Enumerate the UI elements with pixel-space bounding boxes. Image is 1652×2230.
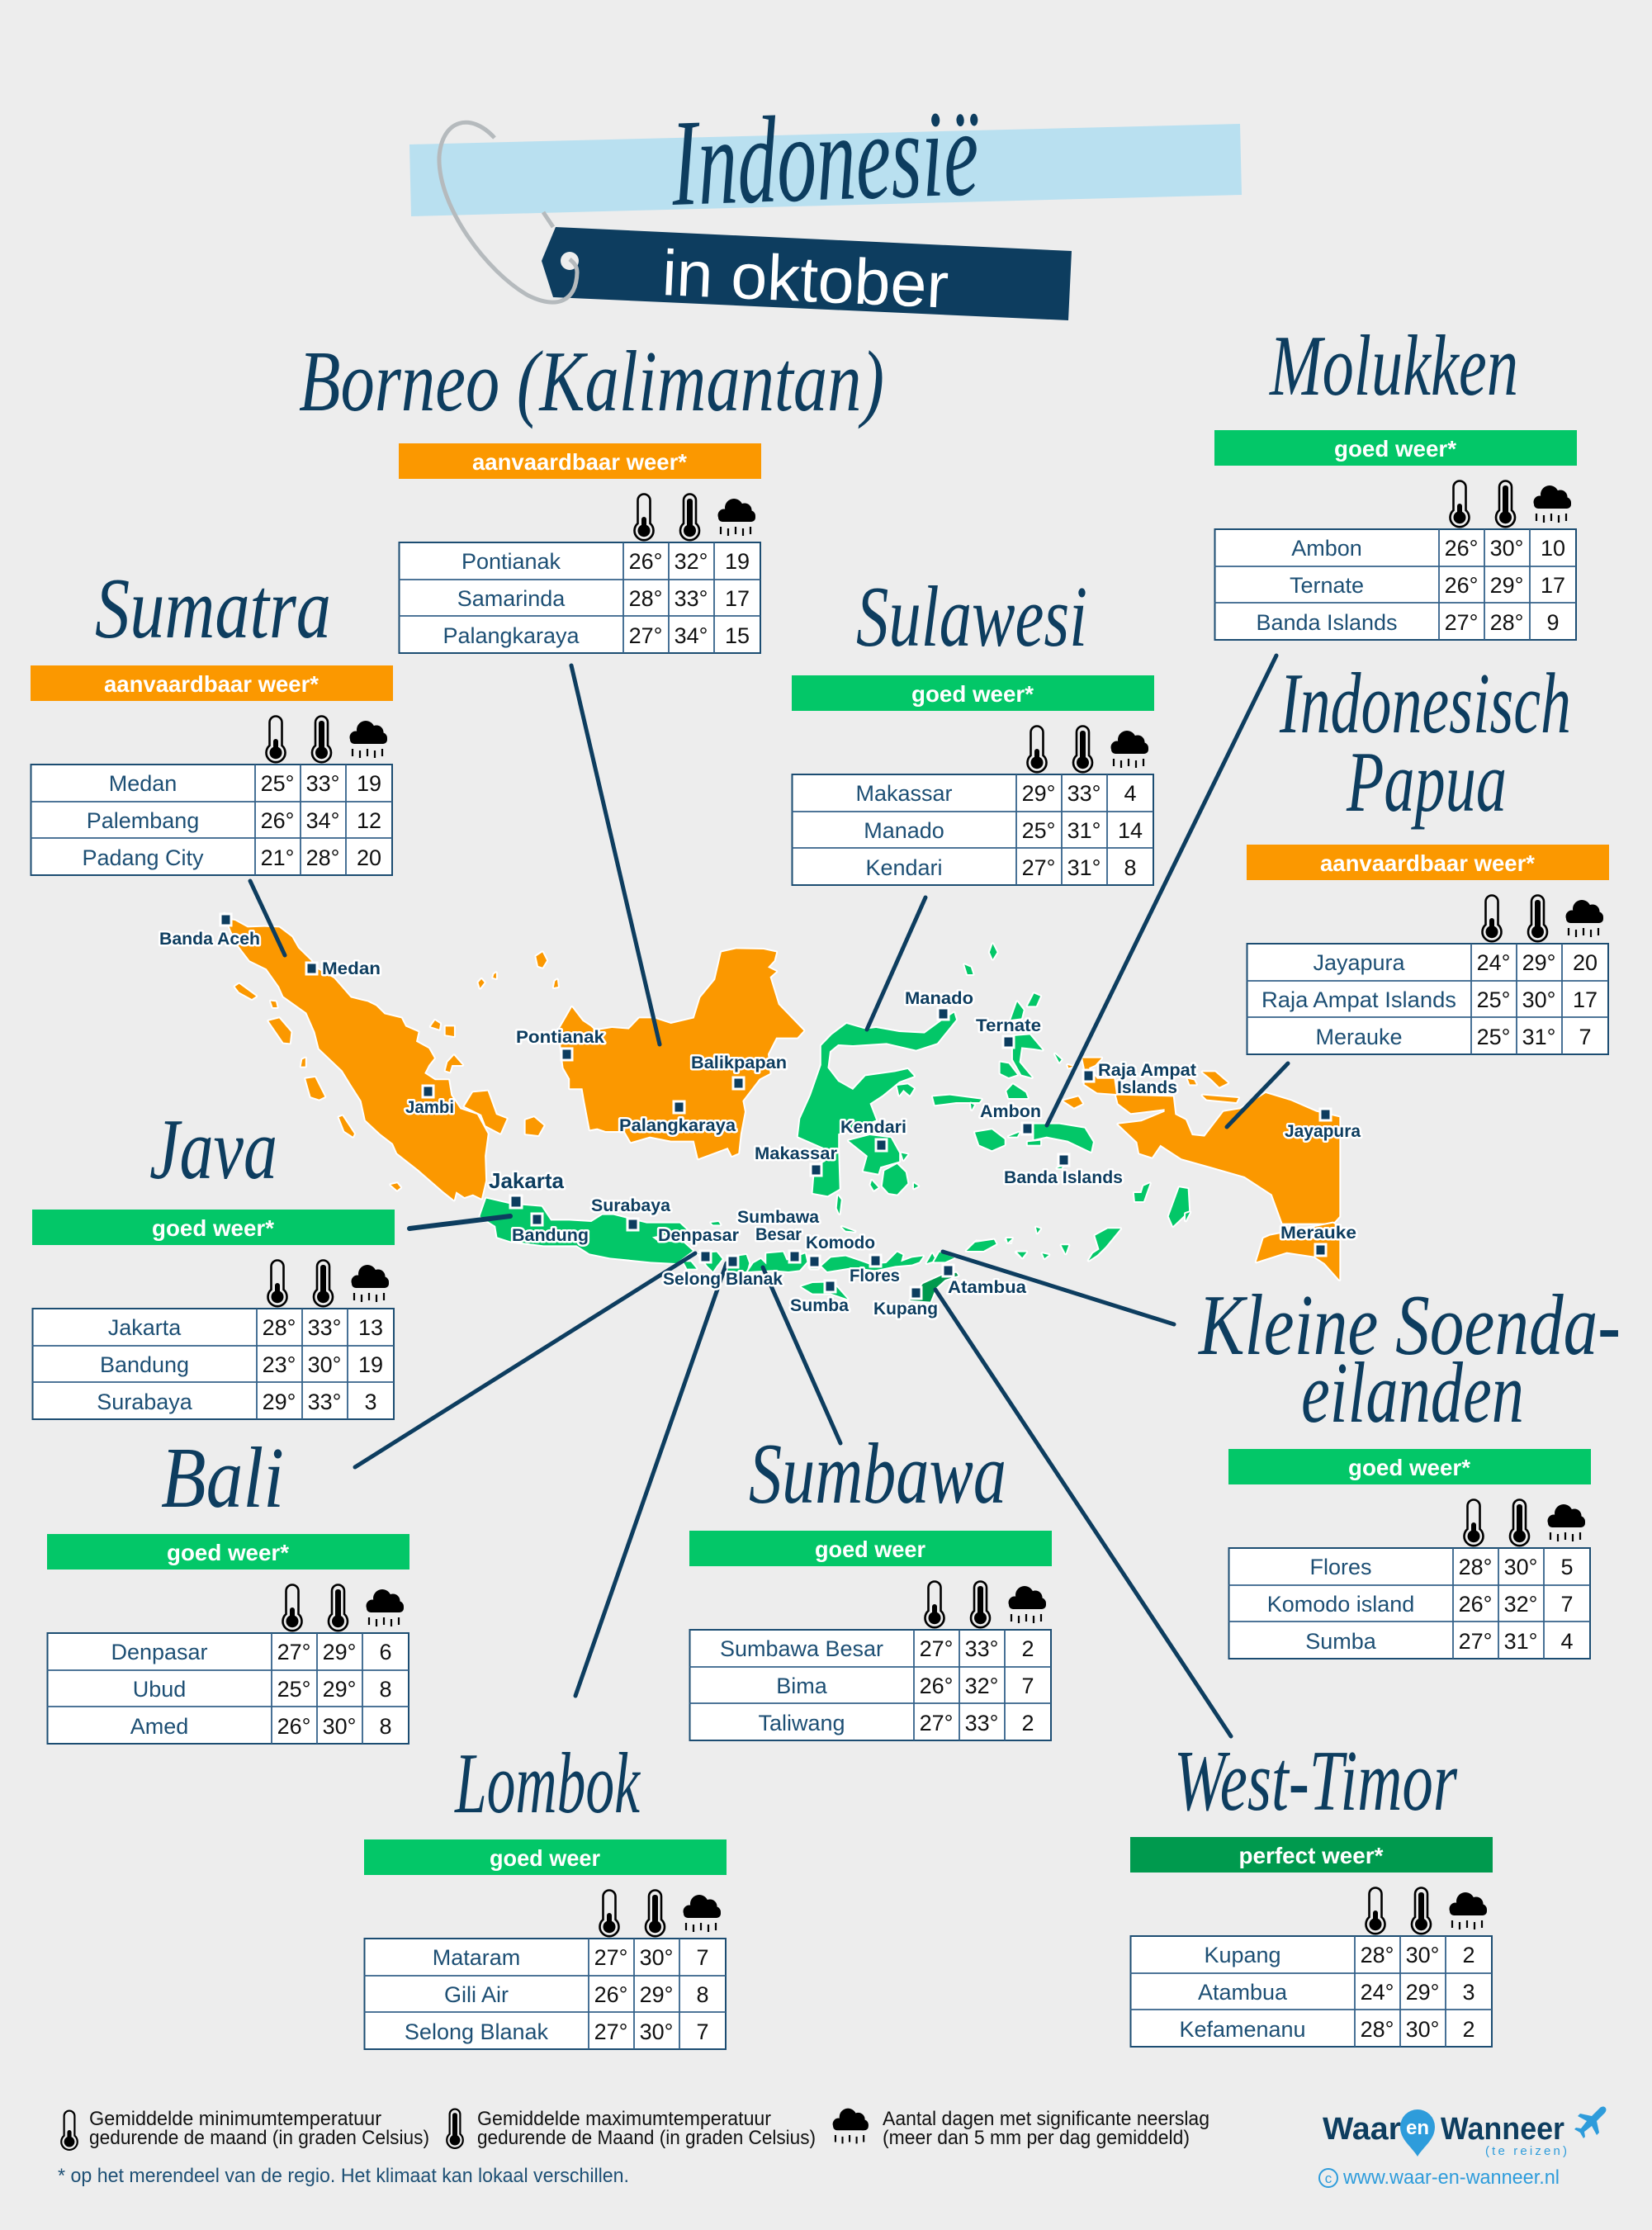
table: 15: [725, 623, 750, 648]
marker: Denpasar: Denpasar: [658, 1226, 739, 1245]
marker: Surabaya: [591, 1196, 670, 1230]
panel: Molukken: [1214, 430, 1577, 640]
marker: Banda Aceh: [159, 914, 260, 949]
table: Medan: [109, 771, 177, 796]
heading: Indonesisch Papua: Papua: [1346, 733, 1507, 830]
table: 24°: [1361, 1980, 1394, 2005]
marker: Palangkaraya: Palangkaraya: [619, 1116, 736, 1135]
table: Komodo island: [1267, 1592, 1414, 1617]
table: 8: [696, 1982, 709, 2007]
rating banner: goed weer*: [167, 1540, 289, 1565]
marker: Kupang: Kupang: [873, 1300, 938, 1319]
icons: [282, 1585, 404, 1631]
table: 29°: [323, 1640, 356, 1664]
table: 17: [1573, 987, 1598, 1012]
legend: minimum temperature: [61, 2108, 429, 2150]
table: 30°: [1504, 1555, 1537, 1579]
marker: Kupang: [873, 1287, 938, 1319]
marker: Flores: [850, 1255, 900, 1285]
legend: maximum temperature: Gemiddelde maximumtemperatuur: [477, 2108, 771, 2130]
table: 33°: [675, 586, 708, 611]
table: 33°: [1067, 781, 1101, 806]
table: 25°: [261, 771, 294, 796]
marker: Selong Blanak: [663, 1256, 783, 1289]
table: Samarinda: [457, 586, 566, 611]
table: 30°: [640, 2019, 673, 2044]
marker: Raja Ampat Islands: Raja Ampat: [1098, 1061, 1196, 1080]
legend: rain days: Aantal dagen met significante neerslag: [883, 2108, 1209, 2130]
table: Surabaya: [97, 1390, 193, 1414]
table: Pontianak: [462, 549, 561, 574]
table: 28°: [1361, 2017, 1394, 2042]
table: Selong Blanak: [405, 2019, 549, 2044]
panel: Borneo: [399, 443, 761, 653]
heading: Kleine Soenda-eilanden: [1197, 1276, 1621, 1441]
rating banner: [1247, 845, 1609, 880]
marker: Merauke: [1280, 1224, 1356, 1256]
icons: [1465, 1499, 1585, 1546]
marker: Ternate: [976, 1016, 1041, 1048]
table: Ubud: [133, 1677, 186, 1702]
marker: Jakarta: Jakarta: [489, 1168, 565, 1193]
marker: Jakarta: [489, 1168, 565, 1208]
marker: Sumbawa Besar: Sumbawa: [737, 1208, 819, 1227]
table: Jayapura: [1313, 950, 1406, 975]
table: 31°: [1067, 818, 1101, 843]
table: 26°: [629, 549, 662, 574]
logo: Waar en Wanneer: Wanneer: [1441, 2112, 1564, 2147]
marker: Bandung: [512, 1214, 589, 1245]
rating banner: [792, 675, 1154, 711]
logo: Waar en Wanneer: [1323, 2107, 1606, 2158]
table: 27°: [1445, 610, 1478, 635]
heading: Sulawesi: Sulawesi: [856, 568, 1087, 665]
title band: [409, 124, 1242, 216]
marker: Jambi: [405, 1086, 454, 1117]
website: www.waar-en-wanneer.nl: [1342, 2166, 1560, 2189]
table: 20: [357, 845, 381, 870]
marker: Raja Ampat Islands: [1083, 1061, 1196, 1097]
table: 8: [379, 1714, 392, 1739]
table: 27°: [629, 623, 662, 648]
title: Indonesië: [669, 84, 982, 232]
rating banner: aanvaardbaar weer*: [104, 671, 319, 697]
table: [31, 765, 392, 875]
table: 31°: [1522, 1025, 1555, 1049]
table: Ternate: [1290, 573, 1364, 598]
table: 7: [696, 2019, 709, 2044]
table: Flores: [1309, 1555, 1372, 1579]
marker: Banda Islands: Banda Islands: [1004, 1168, 1123, 1187]
rating banner: goed weer*: [911, 681, 1034, 707]
panel: West-Timor: [1130, 1837, 1493, 2047]
heading: Sumatra: Sumatra: [95, 560, 331, 656]
legend: minimum temperature: Gemiddelde minimumtemperatuur: [89, 2108, 381, 2130]
table: 29°: [263, 1390, 296, 1414]
table: 5: [1560, 1555, 1574, 1579]
table: [792, 774, 1153, 885]
rating banner: [31, 665, 393, 701]
marker: Sumbawa Besar: Besar: [755, 1225, 802, 1244]
marker: Jambi: Jambi: [405, 1098, 454, 1117]
table: [47, 1633, 409, 1744]
table: 34°: [675, 623, 708, 648]
table: 27°: [277, 1640, 310, 1664]
table: 29°: [323, 1677, 356, 1702]
table: [1130, 1936, 1492, 2047]
table: 33°: [308, 1315, 341, 1340]
logo: Waar en Wanneer: Waar: [1323, 2112, 1401, 2147]
icons: [925, 1582, 1046, 1627]
table: 28°: [263, 1315, 296, 1340]
table: 30°: [323, 1714, 356, 1739]
table: 13: [358, 1315, 383, 1340]
table: 32°: [965, 1674, 998, 1698]
table: [689, 1630, 1051, 1740]
marker: Merauke: Merauke: [1280, 1224, 1356, 1243]
marker: Makassar: Makassar: [755, 1144, 837, 1163]
heading: West-Timor: West-Timor: [1174, 1732, 1458, 1829]
rating banner: [1228, 1449, 1591, 1484]
table: 25°: [1477, 987, 1510, 1012]
table: [1214, 529, 1576, 640]
table: 4: [1124, 781, 1137, 806]
rating banner: aanvaardbaar weer*: [1320, 850, 1535, 876]
footnote: * op het merendeel van de regio. Het klimaat kan lokaal verschillen.: [58, 2165, 629, 2187]
rating banner: [364, 1839, 727, 1875]
rating banner: [1214, 430, 1577, 466]
table: 21°: [261, 845, 294, 870]
marker: Komodo: [806, 1233, 875, 1267]
table: 19: [725, 549, 750, 574]
map: Sulawesi and Maluku: [798, 944, 1190, 1261]
marker: Manado: Manado: [905, 989, 973, 1008]
table: 2: [1462, 1943, 1475, 1967]
heading: Java: Java: [149, 1101, 277, 1197]
heading: Kleine Soenda-eilanden: eilanden: [1301, 1344, 1524, 1441]
table: Kendari: [865, 855, 943, 880]
rating banner: goed weer: [490, 1845, 600, 1871]
table: 27°: [920, 1636, 953, 1661]
table: 2: [1021, 1711, 1034, 1735]
panel: Sumbawa: [689, 1531, 1052, 1740]
legend: minimum temperature: gedurende de maand (in graden Celsius): [89, 2127, 429, 2149]
table: Manado: [864, 818, 944, 843]
table: Raja Ampat Islands: [1261, 987, 1456, 1012]
table: 19: [358, 1352, 383, 1377]
rating banner: [399, 443, 761, 479]
table: Makassar: [855, 781, 953, 806]
icons: [599, 1891, 721, 1936]
rating banner: goed weer: [815, 1536, 925, 1562]
table: Ambon: [1291, 536, 1362, 561]
table: 27°: [1459, 1629, 1492, 1654]
tag: in oktober: in oktober: [660, 236, 950, 322]
panel: Java: [32, 1210, 395, 1419]
marker: Ternate: Ternate: [976, 1016, 1041, 1035]
tag: in oktober: [439, 122, 1072, 322]
table: Denpasar: [111, 1640, 208, 1664]
marker: Raja Ampat Islands: Islands: [1117, 1078, 1177, 1097]
legend: maximum temperature: gedurende de Maand (in graden Celsius): [477, 2127, 816, 2149]
table: Merauke: [1315, 1025, 1403, 1049]
table: 33°: [965, 1711, 998, 1735]
table: 26°: [1445, 536, 1478, 561]
table: 2: [1021, 1636, 1034, 1661]
leader lines: [250, 656, 1288, 1736]
marker: Jayapura: [1285, 1109, 1361, 1141]
table: Mataram: [433, 1945, 520, 1970]
table: 33°: [965, 1636, 998, 1661]
table: 3: [364, 1390, 377, 1414]
panel: Bali: [47, 1534, 409, 1744]
table: 4: [1560, 1629, 1574, 1654]
table: 33°: [306, 771, 339, 796]
legend: [61, 2108, 1209, 2150]
icons: [1450, 481, 1571, 527]
table: 31°: [1504, 1629, 1537, 1654]
table: 25°: [1477, 1025, 1510, 1049]
table: Sumbawa Besar: [720, 1636, 883, 1661]
icons: [1366, 1887, 1487, 1934]
icons: [1483, 895, 1603, 941]
table: 20: [1573, 950, 1598, 975]
table: 27°: [594, 2019, 627, 2044]
table: 30°: [640, 1945, 673, 1970]
marker: Atambua: Atambua: [948, 1278, 1026, 1297]
icons: [266, 717, 387, 762]
rating banner: perfect weer*: [1238, 1843, 1384, 1868]
marker: Flores: Flores: [850, 1267, 900, 1285]
table: [32, 1309, 394, 1419]
panel: Sulawesi: [792, 675, 1154, 885]
table: 7: [1579, 1025, 1592, 1049]
marker: Jayapura: Jayapura: [1285, 1122, 1361, 1141]
table: 3: [1462, 1980, 1475, 2005]
marker: Sumbawa Besar: [737, 1208, 819, 1262]
heading: Bali: Bali: [161, 1429, 284, 1526]
table: Amed: [130, 1714, 188, 1739]
table: 25°: [1022, 818, 1055, 843]
map of Indonesia: [225, 914, 1339, 1302]
map city labels and markers: [159, 914, 1361, 1319]
table: 26°: [261, 808, 294, 833]
heading: Borneo: Borneo (Kalimantan): [299, 333, 884, 429]
table: 27°: [1022, 855, 1055, 880]
table: [1228, 1548, 1590, 1659]
panel: Kleine Soenda-eilanden: [1228, 1449, 1591, 1659]
table: 30°: [1406, 1943, 1439, 1967]
table: 28°: [629, 586, 662, 611]
table: 29°: [1522, 950, 1555, 975]
table: 23°: [263, 1352, 296, 1377]
table: Gili Air: [444, 1982, 509, 2007]
table: 7: [696, 1945, 709, 1970]
icons: [267, 1260, 389, 1306]
table: 27°: [920, 1711, 953, 1735]
legend: maximum temperature: [447, 2108, 816, 2149]
marker: Pontianak: [516, 1028, 604, 1060]
marker: Medan: Medan: [322, 959, 381, 978]
table: 26°: [1459, 1592, 1492, 1617]
table: 32°: [1504, 1592, 1537, 1617]
table: 26°: [1445, 573, 1478, 598]
map: Papua: [1063, 1058, 1339, 1280]
marker: Denpasar: [658, 1226, 739, 1262]
website: c: [1325, 2171, 1332, 2186]
table: Banda Islands: [1256, 610, 1398, 635]
table: 30°: [1522, 987, 1555, 1012]
table: 26°: [920, 1674, 953, 1698]
table: Kefamenanu: [1179, 2017, 1306, 2042]
table: 9: [1546, 610, 1560, 635]
table: 26°: [594, 1982, 627, 2007]
table: 29°: [1406, 1980, 1439, 2005]
marker: Palangkaraya: [619, 1101, 736, 1135]
panel: Sumatra: [31, 665, 393, 875]
icons: [634, 494, 755, 540]
rating banner: goed weer*: [1348, 1455, 1470, 1480]
marker: Balikpapan: Balikpapan: [691, 1053, 787, 1072]
rating banner: [689, 1531, 1052, 1566]
table: Kupang: [1204, 1943, 1281, 1967]
marker: Bandung: Bandung: [512, 1226, 589, 1245]
table: 2: [1462, 2017, 1475, 2042]
heading: Lombok: Lombok: [454, 1735, 641, 1831]
legend: rain days: [833, 2108, 1209, 2149]
table: [1247, 944, 1608, 1054]
rating banner: [1130, 1837, 1493, 1873]
table: Palangkaraya: [443, 623, 580, 648]
table: 7: [1021, 1674, 1034, 1698]
table: 19: [357, 771, 381, 796]
table: 8: [1124, 855, 1137, 880]
table: 10: [1541, 536, 1565, 561]
marker: Manado: [905, 989, 973, 1020]
marker: Banda Aceh: Banda Aceh: [159, 930, 260, 949]
marker: Surabaya: Surabaya: [591, 1196, 670, 1215]
table: 28°: [1361, 1943, 1394, 1967]
table: 31°: [1067, 855, 1101, 880]
rating banner: [32, 1210, 395, 1245]
logo: Waar en Wanneer: en: [1406, 2117, 1429, 2139]
table: 30°: [1406, 2017, 1439, 2042]
marker: Komodo: Komodo: [806, 1233, 875, 1252]
map: Java and Lesser Sunda islands: [480, 1199, 1026, 1302]
table: 27°: [594, 1945, 627, 1970]
legend: rain days: (meer dan 5 mm per dag gemiddeld): [883, 2127, 1190, 2149]
marker: Kendari: Kendari: [840, 1118, 906, 1137]
marker: Sumba: Sumba: [790, 1296, 849, 1315]
table: Palembang: [87, 808, 199, 833]
table: 26°: [277, 1714, 310, 1739]
table: Atambua: [1198, 1980, 1288, 2005]
table: Bandung: [100, 1352, 189, 1377]
marker: Kendari: [840, 1118, 906, 1151]
table: 24°: [1477, 950, 1510, 975]
marker: Banda Islands: [1004, 1154, 1123, 1187]
heading: Sumbawa: Sumbawa: [749, 1425, 1006, 1522]
marker: Pontianak: Pontianak: [516, 1028, 604, 1047]
marker: Ambon: [980, 1102, 1041, 1134]
table: 30°: [308, 1352, 341, 1377]
table: 8: [379, 1677, 392, 1702]
table: Jakarta: [108, 1315, 182, 1340]
table: 32°: [675, 549, 708, 574]
logo: Waar en Wanneer: (te reizen): [1485, 2144, 1567, 2158]
table: 7: [1560, 1592, 1574, 1617]
rating banner: aanvaardbaar weer*: [472, 449, 687, 475]
heading: Indonesisch Papua: [1279, 655, 1571, 830]
marker: Sumba: [790, 1281, 849, 1315]
table: 28°: [1459, 1555, 1492, 1579]
rating banner: [47, 1534, 409, 1570]
rating banner: goed weer*: [152, 1215, 274, 1241]
marker: Ambon: Ambon: [980, 1102, 1041, 1121]
table: 29°: [1022, 781, 1055, 806]
heading: Molukken: Molukken: [1269, 317, 1518, 414]
marker: Selong Blanak: Selong Blanak: [663, 1270, 783, 1289]
table: 14: [1118, 818, 1143, 843]
panel: Indonesisch Papua: [1247, 845, 1609, 1054]
table: 6: [379, 1640, 392, 1664]
table: 33°: [308, 1390, 341, 1414]
table: 25°: [277, 1677, 310, 1702]
table: 12: [357, 808, 381, 833]
panel: Lombok: [364, 1839, 727, 2049]
table: 29°: [640, 1982, 673, 2007]
table: 30°: [1490, 536, 1523, 561]
marker: Makassar: [755, 1144, 837, 1176]
rating banner: goed weer*: [1334, 436, 1456, 462]
table: 17: [725, 586, 750, 611]
table: 29°: [1490, 573, 1523, 598]
marker: Balikpapan: [691, 1053, 787, 1089]
table: Bima: [776, 1674, 828, 1698]
map: Sumatra and Borneo: [225, 914, 803, 1200]
table: Sumba: [1305, 1629, 1377, 1654]
table: 34°: [306, 808, 339, 833]
table: 17: [1541, 573, 1565, 598]
marker: Atambua: [943, 1265, 1026, 1297]
table: [364, 1939, 726, 2049]
table: 28°: [306, 845, 339, 870]
icons: [1027, 727, 1148, 772]
table: Taliwang: [758, 1711, 845, 1735]
table: 28°: [1490, 610, 1523, 635]
table: Padang City: [82, 845, 204, 870]
table: [399, 542, 760, 653]
